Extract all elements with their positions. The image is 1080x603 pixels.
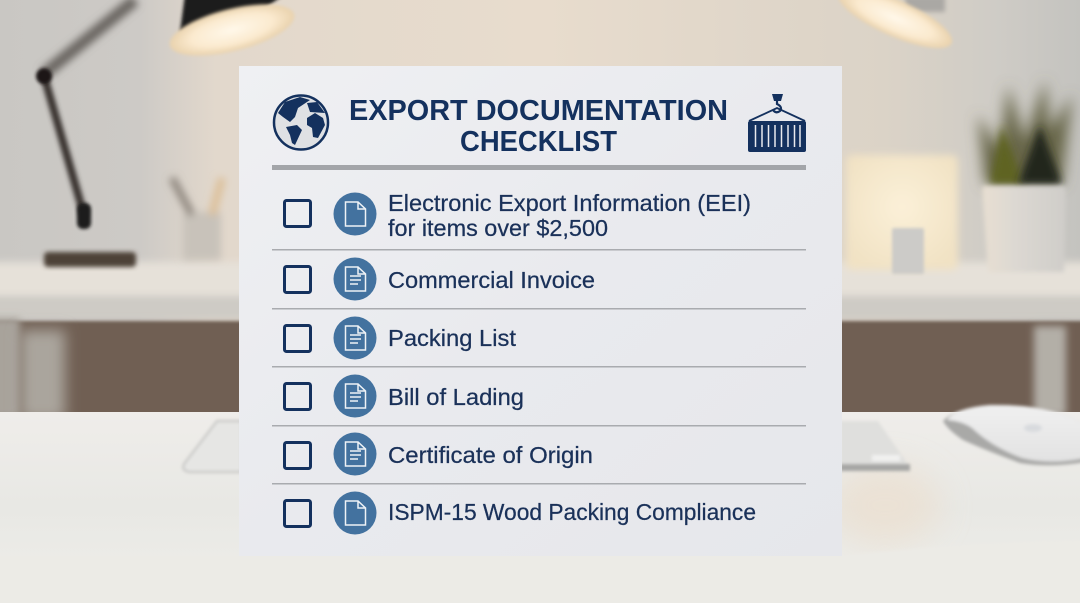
checklist row: Packing List bbox=[284, 316, 517, 360]
checklist row: ISPM-15 bbox=[284, 492, 756, 534]
title: CHECKLIST bbox=[460, 126, 617, 158]
title: EXPORT DOCUMENTATION bbox=[349, 95, 728, 127]
pen holder bbox=[172, 178, 222, 260]
desk lamp bbox=[36, 0, 299, 267]
computer mouse bbox=[943, 405, 1080, 465]
keyboard right bbox=[840, 421, 910, 471]
desk surface bbox=[0, 412, 1080, 603]
icon: globe bbox=[274, 96, 328, 150]
icon: shipping container on crane hook bbox=[748, 94, 806, 152]
right pendant lamp bbox=[831, 0, 959, 60]
back shelf bbox=[0, 262, 1080, 421]
checklist row: EEI: Electronic Export Information (EEI) bbox=[388, 190, 751, 216]
checklist row: Commercial Invoice bbox=[284, 258, 595, 300]
header rule bbox=[272, 165, 806, 170]
desk foreground bbox=[0, 540, 1080, 603]
checklist row: EEI: for items over $2,500 bbox=[388, 215, 608, 241]
checklist row: ISPM-15: ISPM-15 Wood Packing Compliance bbox=[388, 499, 756, 525]
checklist row: Certificate of Origin bbox=[284, 432, 593, 476]
potted plant bbox=[978, 80, 1072, 272]
checklist row: Bill of Lading: Bill of Lading bbox=[388, 384, 524, 410]
checklist row: Bill of Lading bbox=[284, 374, 524, 418]
checklist row: Packing List: Packing List bbox=[388, 325, 517, 351]
panel: checklist card bbox=[239, 66, 842, 556]
title bbox=[349, 95, 728, 158]
checklist row: EEI bbox=[284, 190, 751, 241]
keyboard left bbox=[183, 421, 242, 472]
checklist row: Certificate of Origin: Certificate of Origin bbox=[388, 442, 593, 468]
checklist row: Commercial Invoice: Commercial Invoice bbox=[388, 267, 595, 293]
glowing light box bbox=[846, 155, 958, 274]
